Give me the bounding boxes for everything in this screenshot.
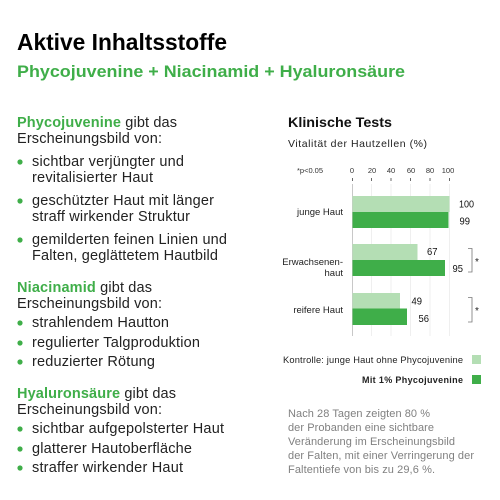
- bars: Erwachsenenhaut: 95: [452, 263, 463, 275]
- list: Niacinamid benefits: strahlendem Hautton: [32, 315, 169, 331]
- list: Niacinamid benefits: reduzierter Rötung: [32, 354, 155, 370]
- bars: junge Haut: [296, 196, 474, 228]
- bars: reifere Haut: 56: [418, 313, 429, 325]
- significance bracket: Erwachsenenhaut: *: [475, 257, 479, 268]
- axis ticks and labels: 20: [368, 166, 376, 175]
- result text block: Faltentiefe von bis zu 29,6 %.: [288, 464, 435, 476]
- result text block: der Probanden eine sichtbare: [288, 422, 434, 434]
- list: Phycojuvenine benefits: geschützter Haut mit länger: [32, 193, 214, 209]
- bars: reifere Haut: reifere Haut: [293, 305, 343, 316]
- panel: Phycojuvenine: [17, 115, 227, 264]
- list: Hyaluronsäure benefits: glatterer Hautoberfläche: [32, 441, 192, 457]
- subtitle: Phycojuvenine + Niacinamid + Hyaluronsäure: [17, 63, 405, 81]
- axis ticks and labels: 60: [407, 166, 415, 175]
- significance note: *p<0.05: [297, 166, 323, 175]
- heading: Phycojuvenine: [17, 115, 177, 147]
- bar chart: [282, 166, 479, 336]
- significance bracket: reifere Haut: *: [475, 306, 479, 317]
- bars: reifere Haut: [293, 293, 429, 325]
- legend: [283, 355, 481, 385]
- list: Phycojuvenine benefits: sichtbar verjüngter und: [32, 154, 184, 170]
- legend: control: Kontrolle: junge Haut ohne Phycojuvenine: [283, 355, 463, 365]
- list: Phycojuvenine benefits: Falten, geglättetem Hautbild: [32, 248, 218, 264]
- heading: Niacinamid: Erscheinungsbild von:: [17, 296, 162, 312]
- list: Niacinamid benefits: regulierter Talgproduktion: [32, 335, 200, 351]
- bars: Erwachsenenhaut: [282, 244, 463, 279]
- chart subtitle: Vitalität der Hautzellen (%): [288, 138, 427, 150]
- list: Hyaluronsäure benefits: straffer wirkender Haut: [32, 460, 183, 476]
- result text block: Veränderung im Erscheinungsbild: [288, 436, 455, 448]
- bars: Erwachsenenhaut: 67: [427, 246, 438, 258]
- list: Phycojuvenine benefits: gemilderten feinen Linien und: [32, 232, 227, 248]
- heading: Hyaluronsäure: Erscheinungsbild von:: [17, 402, 162, 418]
- bars: Erwachsenenhaut: Erwachsenen-: [282, 257, 343, 268]
- bars: junge Haut: junge Haut: [296, 207, 343, 218]
- heading: Hyaluronsäure: Hyaluronsäure gibt das: [17, 386, 176, 402]
- title: Aktive Inhaltsstoffe: [17, 29, 227, 55]
- bars: reifere Haut: 49: [412, 296, 422, 308]
- result text block: der Falten, mit einer Verringerung der: [288, 450, 474, 462]
- bars: junge Haut: 100: [459, 198, 474, 210]
- result text block: [288, 408, 474, 476]
- bars: Erwachsenenhaut: haut: [324, 268, 343, 279]
- list: Hyaluronsäure benefits: sichtbar aufgepolsterter Haut: [32, 421, 224, 437]
- significance bracket: Erwachsenenhaut: [468, 248, 479, 272]
- heading: Hyaluronsäure: [17, 386, 176, 418]
- list: Phycojuvenine benefits: revitalisierter Haut: [32, 170, 153, 186]
- significance bracket: reifere Haut: [468, 298, 479, 322]
- list: Hyaluronsäure benefits: [17, 421, 224, 476]
- axis ticks and labels: [350, 166, 454, 336]
- bars: junge Haut: 99: [460, 216, 470, 228]
- result text block: Nach 28 Tagen zeigten 80 %: [288, 408, 430, 420]
- heading: Klinische Tests: Klinische Tests: [288, 114, 392, 130]
- panel: Hyaluronsäure: [17, 386, 224, 476]
- heading: Phycojuvenine: Phycojuvenine gibt das: [17, 115, 177, 131]
- list: Phycojuvenine benefits: straff wirkender Struktur: [32, 209, 190, 225]
- list: Niacinamid benefits: [17, 315, 200, 370]
- heading: Niacinamid: [17, 280, 162, 312]
- axis ticks and labels: 100: [442, 166, 454, 175]
- axis ticks and labels: 40: [387, 166, 395, 175]
- panel: Niacinamid: [17, 280, 200, 370]
- legend: treatment: Mit 1% Phycojuvenine: [362, 375, 463, 385]
- heading: Phycojuvenine: Erscheinungsbild von:: [17, 131, 162, 147]
- heading: Niacinamid: Niacinamid gibt das: [17, 280, 152, 296]
- axis ticks and labels: 80: [426, 166, 434, 175]
- list: Phycojuvenine benefits: [17, 154, 227, 264]
- axis ticks and labels: 0: [350, 166, 354, 175]
